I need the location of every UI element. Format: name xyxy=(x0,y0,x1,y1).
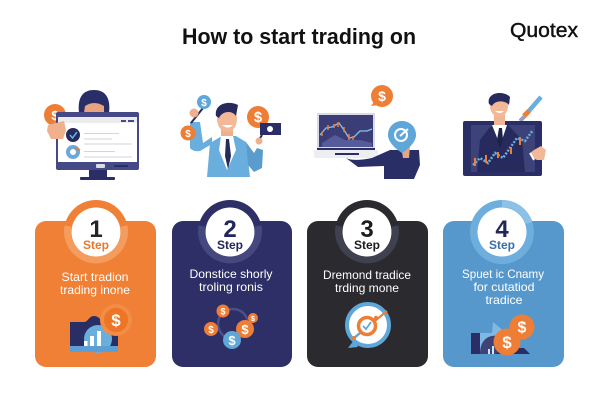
illustration: businessman with coins: $ xyxy=(185,129,191,140)
icon: coins ring: $ xyxy=(241,322,249,337)
step 3 text xyxy=(323,268,411,295)
step 3 text: Dremond tradice xyxy=(323,268,411,282)
illustration: laptop with chart and person: $ xyxy=(378,88,386,104)
illustration: businessman with coins: $ xyxy=(254,109,263,126)
icon: target with check xyxy=(347,304,389,348)
step 3 text: trding mone xyxy=(335,281,399,295)
icon: coins ring: $ xyxy=(228,333,236,348)
step 1 text: Start tradion xyxy=(62,270,128,284)
step badge 2: 2 xyxy=(223,216,237,243)
step badge 1: Step xyxy=(83,238,109,252)
logo: Quotex: Quotex xyxy=(510,20,578,42)
step badge 2 xyxy=(198,200,262,264)
icon: coins and chart xyxy=(471,314,534,356)
icon: coins ring: $ xyxy=(208,325,214,336)
step 4 text: for cutatiod xyxy=(474,280,534,294)
panel: step 3 xyxy=(307,200,428,367)
step 4 text: tradice xyxy=(486,293,523,307)
icon: coins ring: $ xyxy=(251,316,255,323)
step 1 text xyxy=(60,270,130,297)
step 2 text xyxy=(190,267,272,294)
step badge 3: 3 xyxy=(360,216,374,243)
step badge 4: Step xyxy=(489,238,515,252)
step badge 4 xyxy=(470,200,534,264)
step badge 1 xyxy=(64,200,128,264)
step badge 4: 4 xyxy=(495,216,509,243)
illustration: woman behind monitor xyxy=(44,90,139,180)
step badge 3: Step xyxy=(354,238,380,252)
step 1 text: trading inone xyxy=(60,283,130,297)
panel: step 2 xyxy=(172,200,292,367)
step 4 text: Spuet ic Cnamy xyxy=(462,267,544,281)
illustration: man on trading tablet xyxy=(463,93,546,176)
icon: coins ring: $ xyxy=(220,306,226,316)
step 2 text: troling ronis xyxy=(199,280,263,294)
title: How to start trading on xyxy=(182,24,416,49)
illustration: woman behind monitor: $ xyxy=(51,108,59,123)
panel: step 1 xyxy=(35,200,156,367)
icon: laptop chart with dollar coin xyxy=(70,304,132,353)
icon: coins and chart: $ xyxy=(502,333,512,352)
icon: coins and chart: $ xyxy=(518,320,527,336)
step badge 3 xyxy=(335,200,399,264)
step badge 1: 1 xyxy=(89,216,103,243)
step badge 2: Step xyxy=(217,238,243,252)
illustration: laptop with chart and person xyxy=(314,85,420,179)
illustration: businessman with coins xyxy=(180,95,281,177)
panel: step 4 xyxy=(443,200,564,367)
step 4 text xyxy=(462,267,544,307)
step 2 text: Donstice shorly xyxy=(190,267,272,281)
illustration: businessman with coins: $ xyxy=(201,98,207,109)
icon: coins ring xyxy=(204,304,258,349)
icon: laptop chart with dollar coin: $ xyxy=(111,311,121,330)
